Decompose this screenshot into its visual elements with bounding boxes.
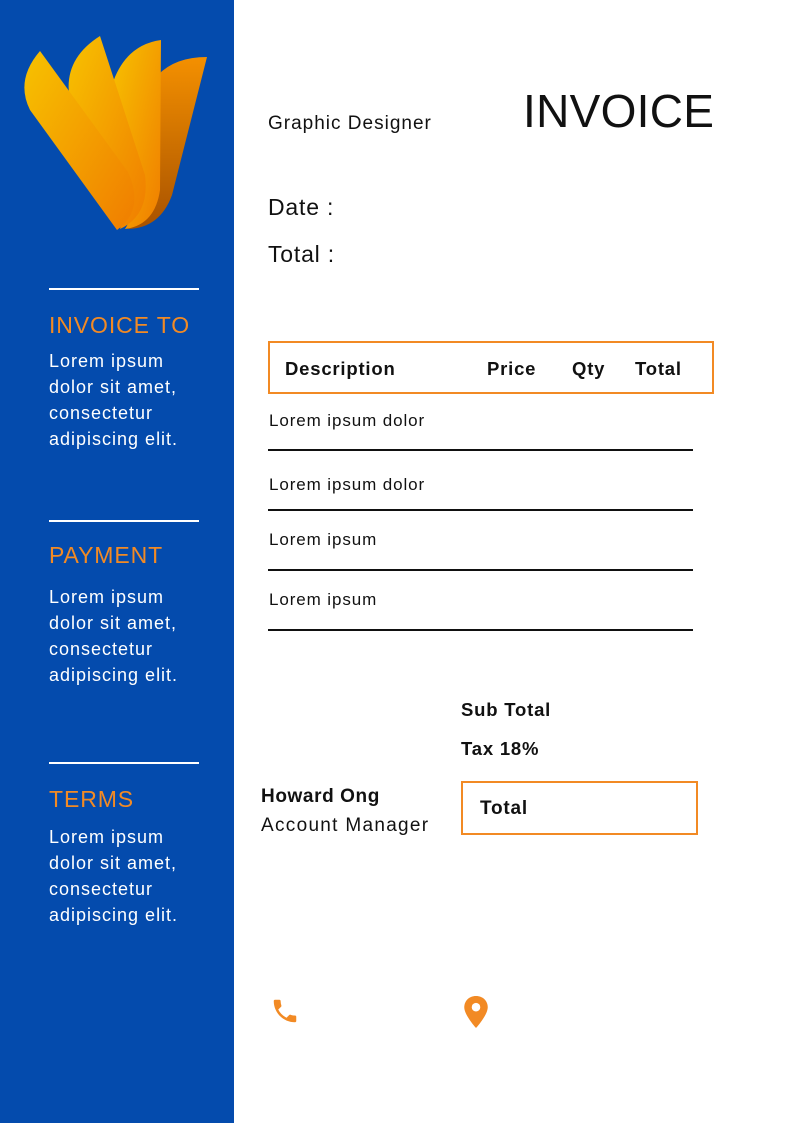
section: terms: Lorem ipsum bbox=[49, 827, 164, 847]
section: terms: adipiscing elit. bbox=[49, 905, 178, 925]
table rows: Lorem ipsum dolor bbox=[269, 411, 425, 430]
date and total: Date : bbox=[268, 194, 334, 220]
table header: Qty bbox=[572, 358, 605, 379]
totals bbox=[461, 699, 551, 759]
section: payment: consectetur bbox=[49, 639, 153, 659]
table header: Total bbox=[635, 358, 682, 379]
section: invoice to: INVOICE TO bbox=[49, 312, 190, 338]
section: payment: PAYMENT bbox=[49, 542, 163, 568]
section: invoice to: dolor sit amet, bbox=[49, 377, 177, 397]
totals: Sub Total bbox=[461, 699, 551, 720]
sidebar bbox=[0, 0, 234, 1123]
logo bbox=[24, 36, 207, 230]
signature: Howard Ong bbox=[261, 786, 380, 807]
section: terms: dolor sit amet, bbox=[49, 853, 177, 873]
signature: Account Manager bbox=[261, 815, 429, 836]
signature bbox=[261, 786, 429, 836]
table rows bbox=[268, 411, 693, 631]
table rows: Lorem ipsum dolor bbox=[269, 475, 425, 494]
title: INVOICE bbox=[523, 85, 714, 137]
subtitle: Graphic Designer bbox=[268, 113, 432, 134]
table header: Description bbox=[285, 358, 396, 379]
section: invoice to: consectetur bbox=[49, 403, 153, 423]
table header bbox=[268, 341, 714, 394]
date and total: Total : bbox=[268, 241, 335, 267]
section: payment: Lorem ipsum bbox=[49, 587, 164, 607]
section: terms: consectetur bbox=[49, 879, 153, 899]
section: payment: dolor sit amet, bbox=[49, 613, 177, 633]
totals: Tax 18% bbox=[461, 738, 539, 759]
section: terms bbox=[49, 762, 199, 925]
total box: Total bbox=[480, 798, 528, 819]
table header: Price bbox=[487, 358, 536, 379]
section: payment bbox=[49, 520, 199, 685]
section: terms: TERMS bbox=[49, 786, 134, 812]
table rows: Lorem ipsum bbox=[269, 530, 377, 549]
section: invoice to: adipiscing elit. bbox=[49, 429, 178, 449]
section: invoice to: Lorem ipsum bbox=[49, 351, 164, 371]
section: payment: adipiscing elit. bbox=[49, 665, 178, 685]
section: invoice to bbox=[49, 288, 199, 449]
total box bbox=[461, 781, 698, 835]
table rows: Lorem ipsum bbox=[269, 590, 377, 609]
icon: location bbox=[464, 996, 488, 1028]
date and total bbox=[268, 194, 335, 267]
icon: phone bbox=[274, 1000, 296, 1022]
